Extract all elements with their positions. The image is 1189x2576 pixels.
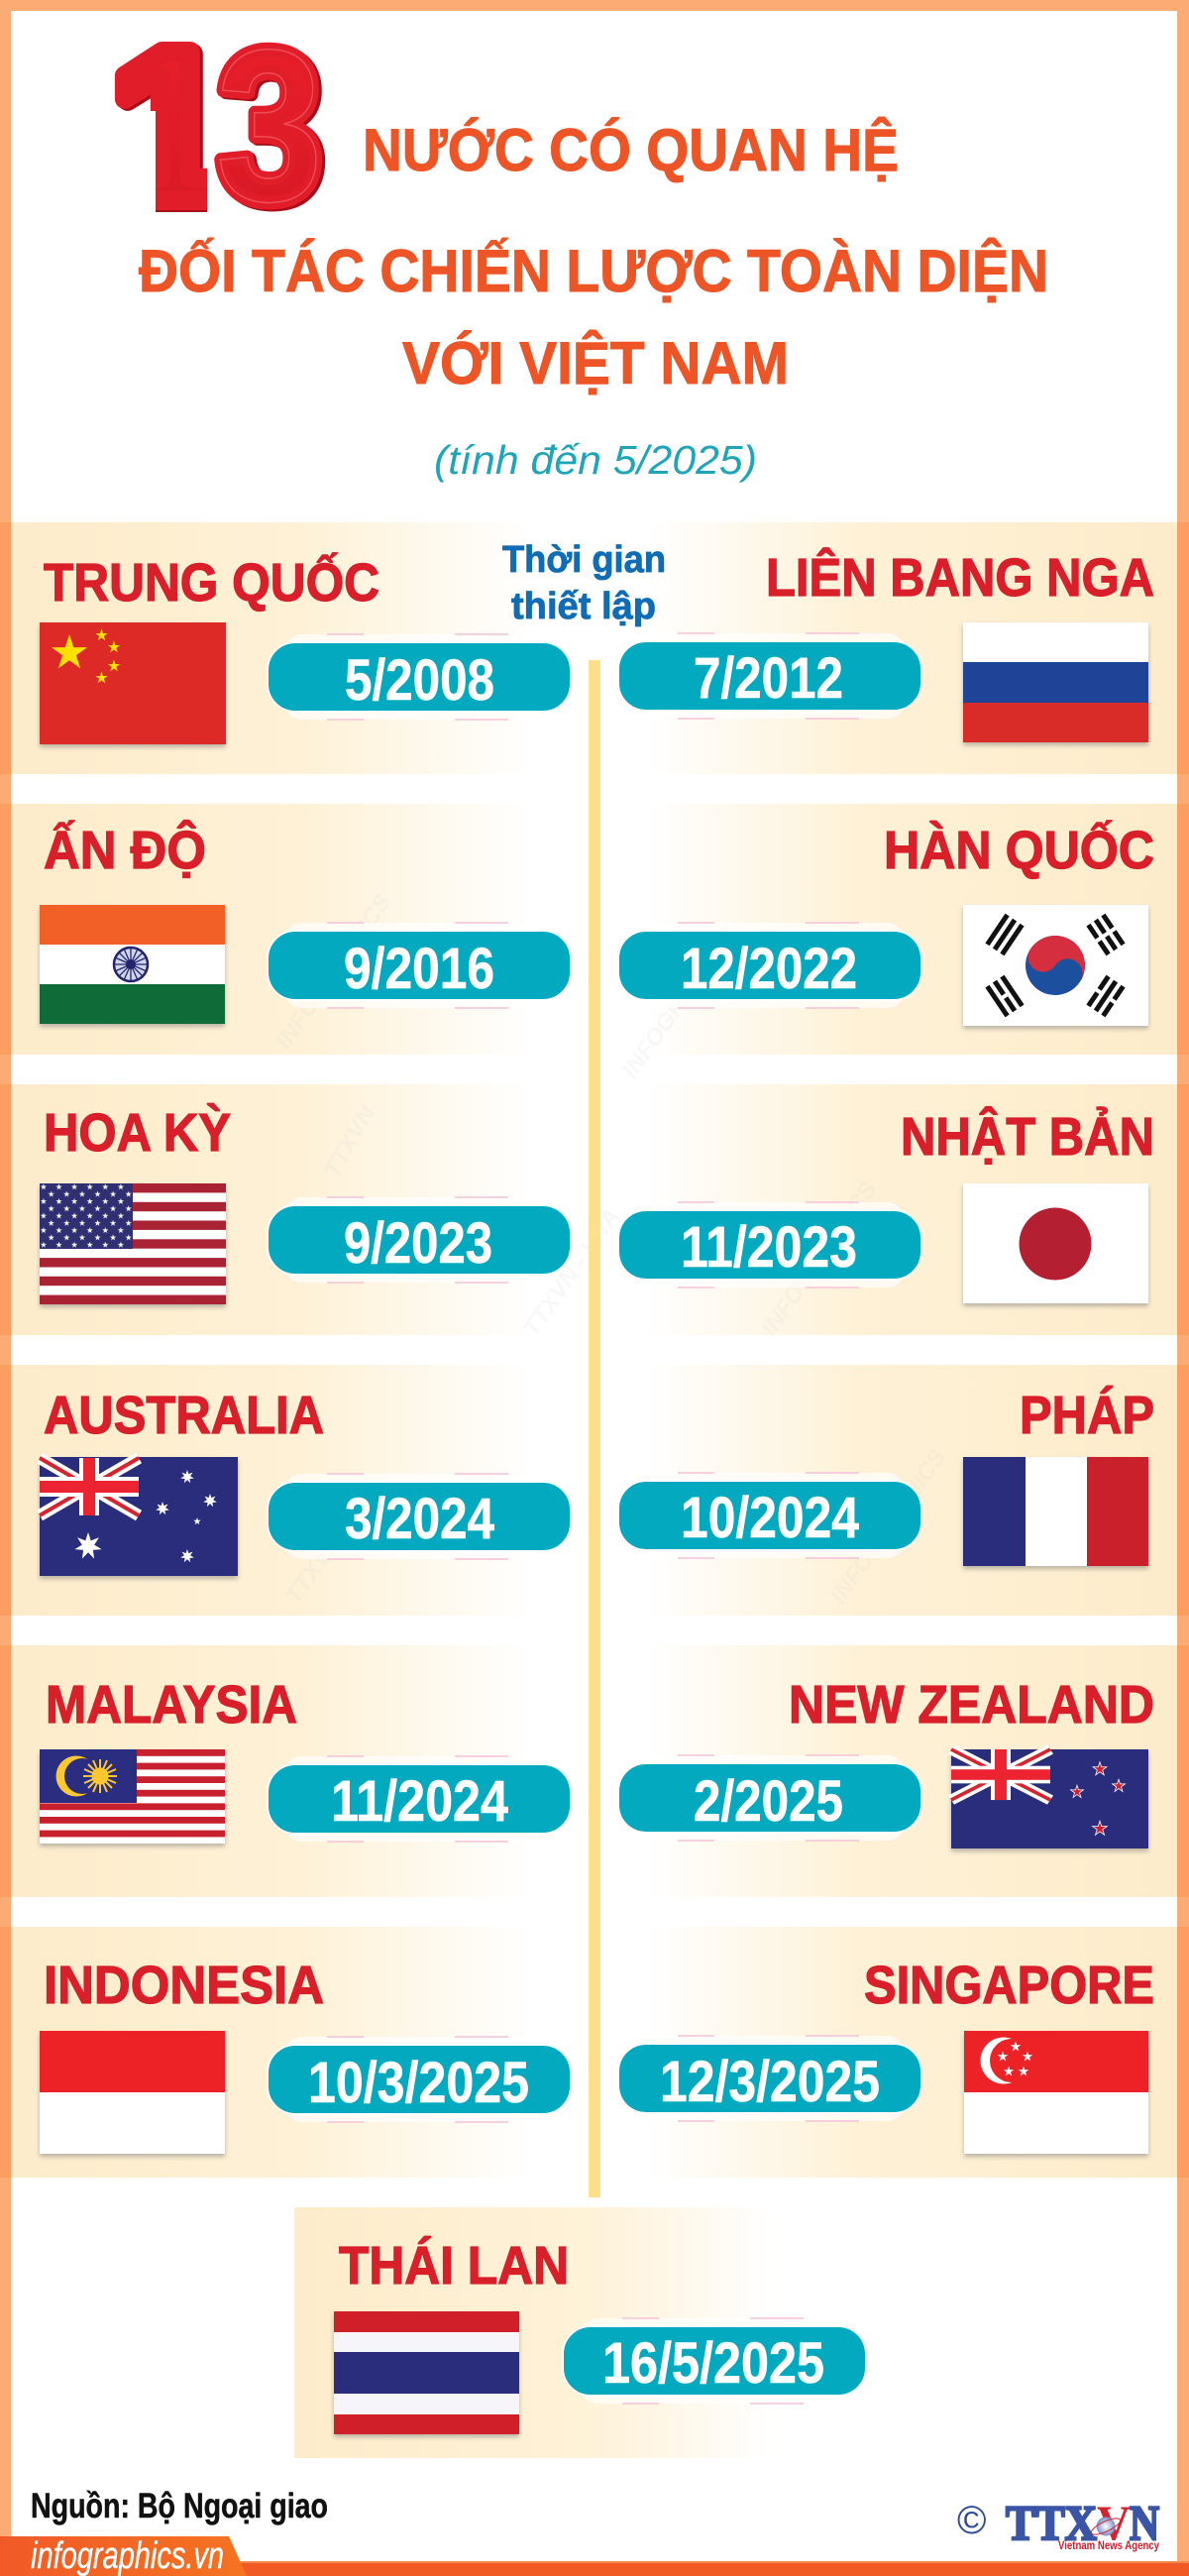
title: VỚI VIỆT NAM (402, 330, 789, 396)
panel: New Zealand: 2/2025 (694, 1769, 843, 1834)
title: NƯỚC CÓ QUAN HỆ (363, 117, 899, 183)
panel: New Zealand (618, 1675, 1154, 1851)
watermarks: TTXVN - VNA (280, 1472, 387, 1609)
logo: TTXVN: © (957, 2499, 986, 2542)
number 13: 1 (113, 8, 233, 249)
panel: Thái Lan (334, 2236, 866, 2437)
panel: Australia: AUSTRALIA (44, 1386, 324, 1445)
panel: Ấn Độ: ẤN ĐỘ (44, 820, 206, 880)
panel: Hoa Kỳ (40, 1103, 571, 1307)
panel: Liên bang Nga (618, 547, 1154, 745)
panel: Singapore (618, 1956, 1154, 2157)
panel: Pháp: 10/2024 (681, 1486, 859, 1550)
number 13: 3 (219, 8, 326, 249)
panel: Trung Quốc (40, 553, 571, 747)
panel: Malaysia (40, 1675, 571, 1847)
panel: Ấn Độ (40, 820, 571, 1027)
number 13 (115, 42, 325, 212)
panel: Nhật Bản (618, 1106, 1154, 1306)
watermarks: TTXVN (319, 1101, 381, 1182)
watermarks: INFOGRAPHICS (617, 919, 743, 1083)
logo: TTXVN (957, 2495, 1160, 2552)
panel: Indonesia (40, 1956, 571, 2157)
panel: Malaysia: 11/2024 (331, 1769, 508, 1834)
panel: Hoa Kỳ: HOA KỲ (44, 1103, 231, 1163)
panel: Nhật Bản: 11/2023 (681, 1215, 857, 1280)
timeline vertical line (589, 660, 600, 2197)
panel: Ấn Độ: 9/2016 (344, 937, 494, 1001)
panel: Hàn Quốc: HÀN QUỐC (884, 821, 1154, 880)
panel: Singapore: 12/3/2025 (660, 2050, 880, 2114)
panel: Hàn Quốc: 12/2022 (681, 937, 857, 1001)
logo: TTXVN: V (1097, 2495, 1131, 2550)
number 13: 1 (110, 6, 230, 247)
panel: Malaysia: MALAYSIA (46, 1675, 297, 1735)
watermarks: INFOGRAPHICS (270, 889, 396, 1054)
panel: Nhật Bản: NHẬT BẢN (901, 1106, 1154, 1167)
heading: setup time: thiết lập (511, 586, 656, 627)
panel: Pháp: PHÁP (1020, 1386, 1154, 1445)
watermarks: INFOGRAPHICS (756, 1176, 882, 1341)
panel: Hàn Quốc (618, 821, 1154, 1029)
panel: Thái Lan: 16/5/2025 (602, 2331, 824, 2396)
subtitle: (tính đến 5/2025) (434, 437, 757, 483)
heading: setup time: Thời gian (502, 539, 666, 581)
watermarks: TTXVN - VNA (518, 1204, 625, 1341)
footer bar: infographics.vn (31, 2535, 224, 2576)
logo: TTXVN: N (1130, 2495, 1159, 2550)
panel: Trung Quốc: TRUNG QUỐC (44, 553, 379, 613)
title (139, 117, 1048, 396)
logo: TTXVN: Vietnam News Agency (1058, 2540, 1160, 2552)
panel: Trung Quốc: 5/2008 (345, 648, 494, 713)
panel: Singapore: SINGAPORE (864, 1956, 1154, 2015)
footer bar (0, 2535, 1189, 2576)
watermarks (270, 889, 951, 1609)
source: Nguồn: Bộ Ngoại giao (31, 2487, 328, 2525)
panel: Pháp (618, 1386, 1154, 1569)
watermarks: INFOGRAPHICS (825, 1444, 951, 1609)
number 13: 3 (216, 6, 323, 247)
title: ĐỐI TÁC CHIẾN LƯỢC TOÀN DIỆN (139, 238, 1048, 304)
panel: Liên bang Nga: LIÊN BANG NGA (766, 547, 1154, 608)
logo: TTXVN: TTX (1006, 2495, 1097, 2550)
panel: Indonesia: INDONESIA (44, 1956, 324, 2015)
panel: Liên bang Nga: 7/2012 (694, 646, 843, 711)
number 13: 3 (216, 6, 323, 247)
panel backgrounds (11, 522, 1177, 2458)
panel: Australia: 3/2024 (345, 1487, 494, 1551)
heading: setup time (502, 539, 666, 627)
panel: Indonesia: 10/3/2025 (308, 2051, 529, 2115)
panel: Thái Lan: THÁI LAN (339, 2236, 569, 2296)
panel: Hoa Kỳ: 9/2023 (344, 1211, 492, 1276)
panel: New Zealand: NEW ZEALAND (789, 1675, 1154, 1735)
panel: Australia (40, 1386, 571, 1579)
